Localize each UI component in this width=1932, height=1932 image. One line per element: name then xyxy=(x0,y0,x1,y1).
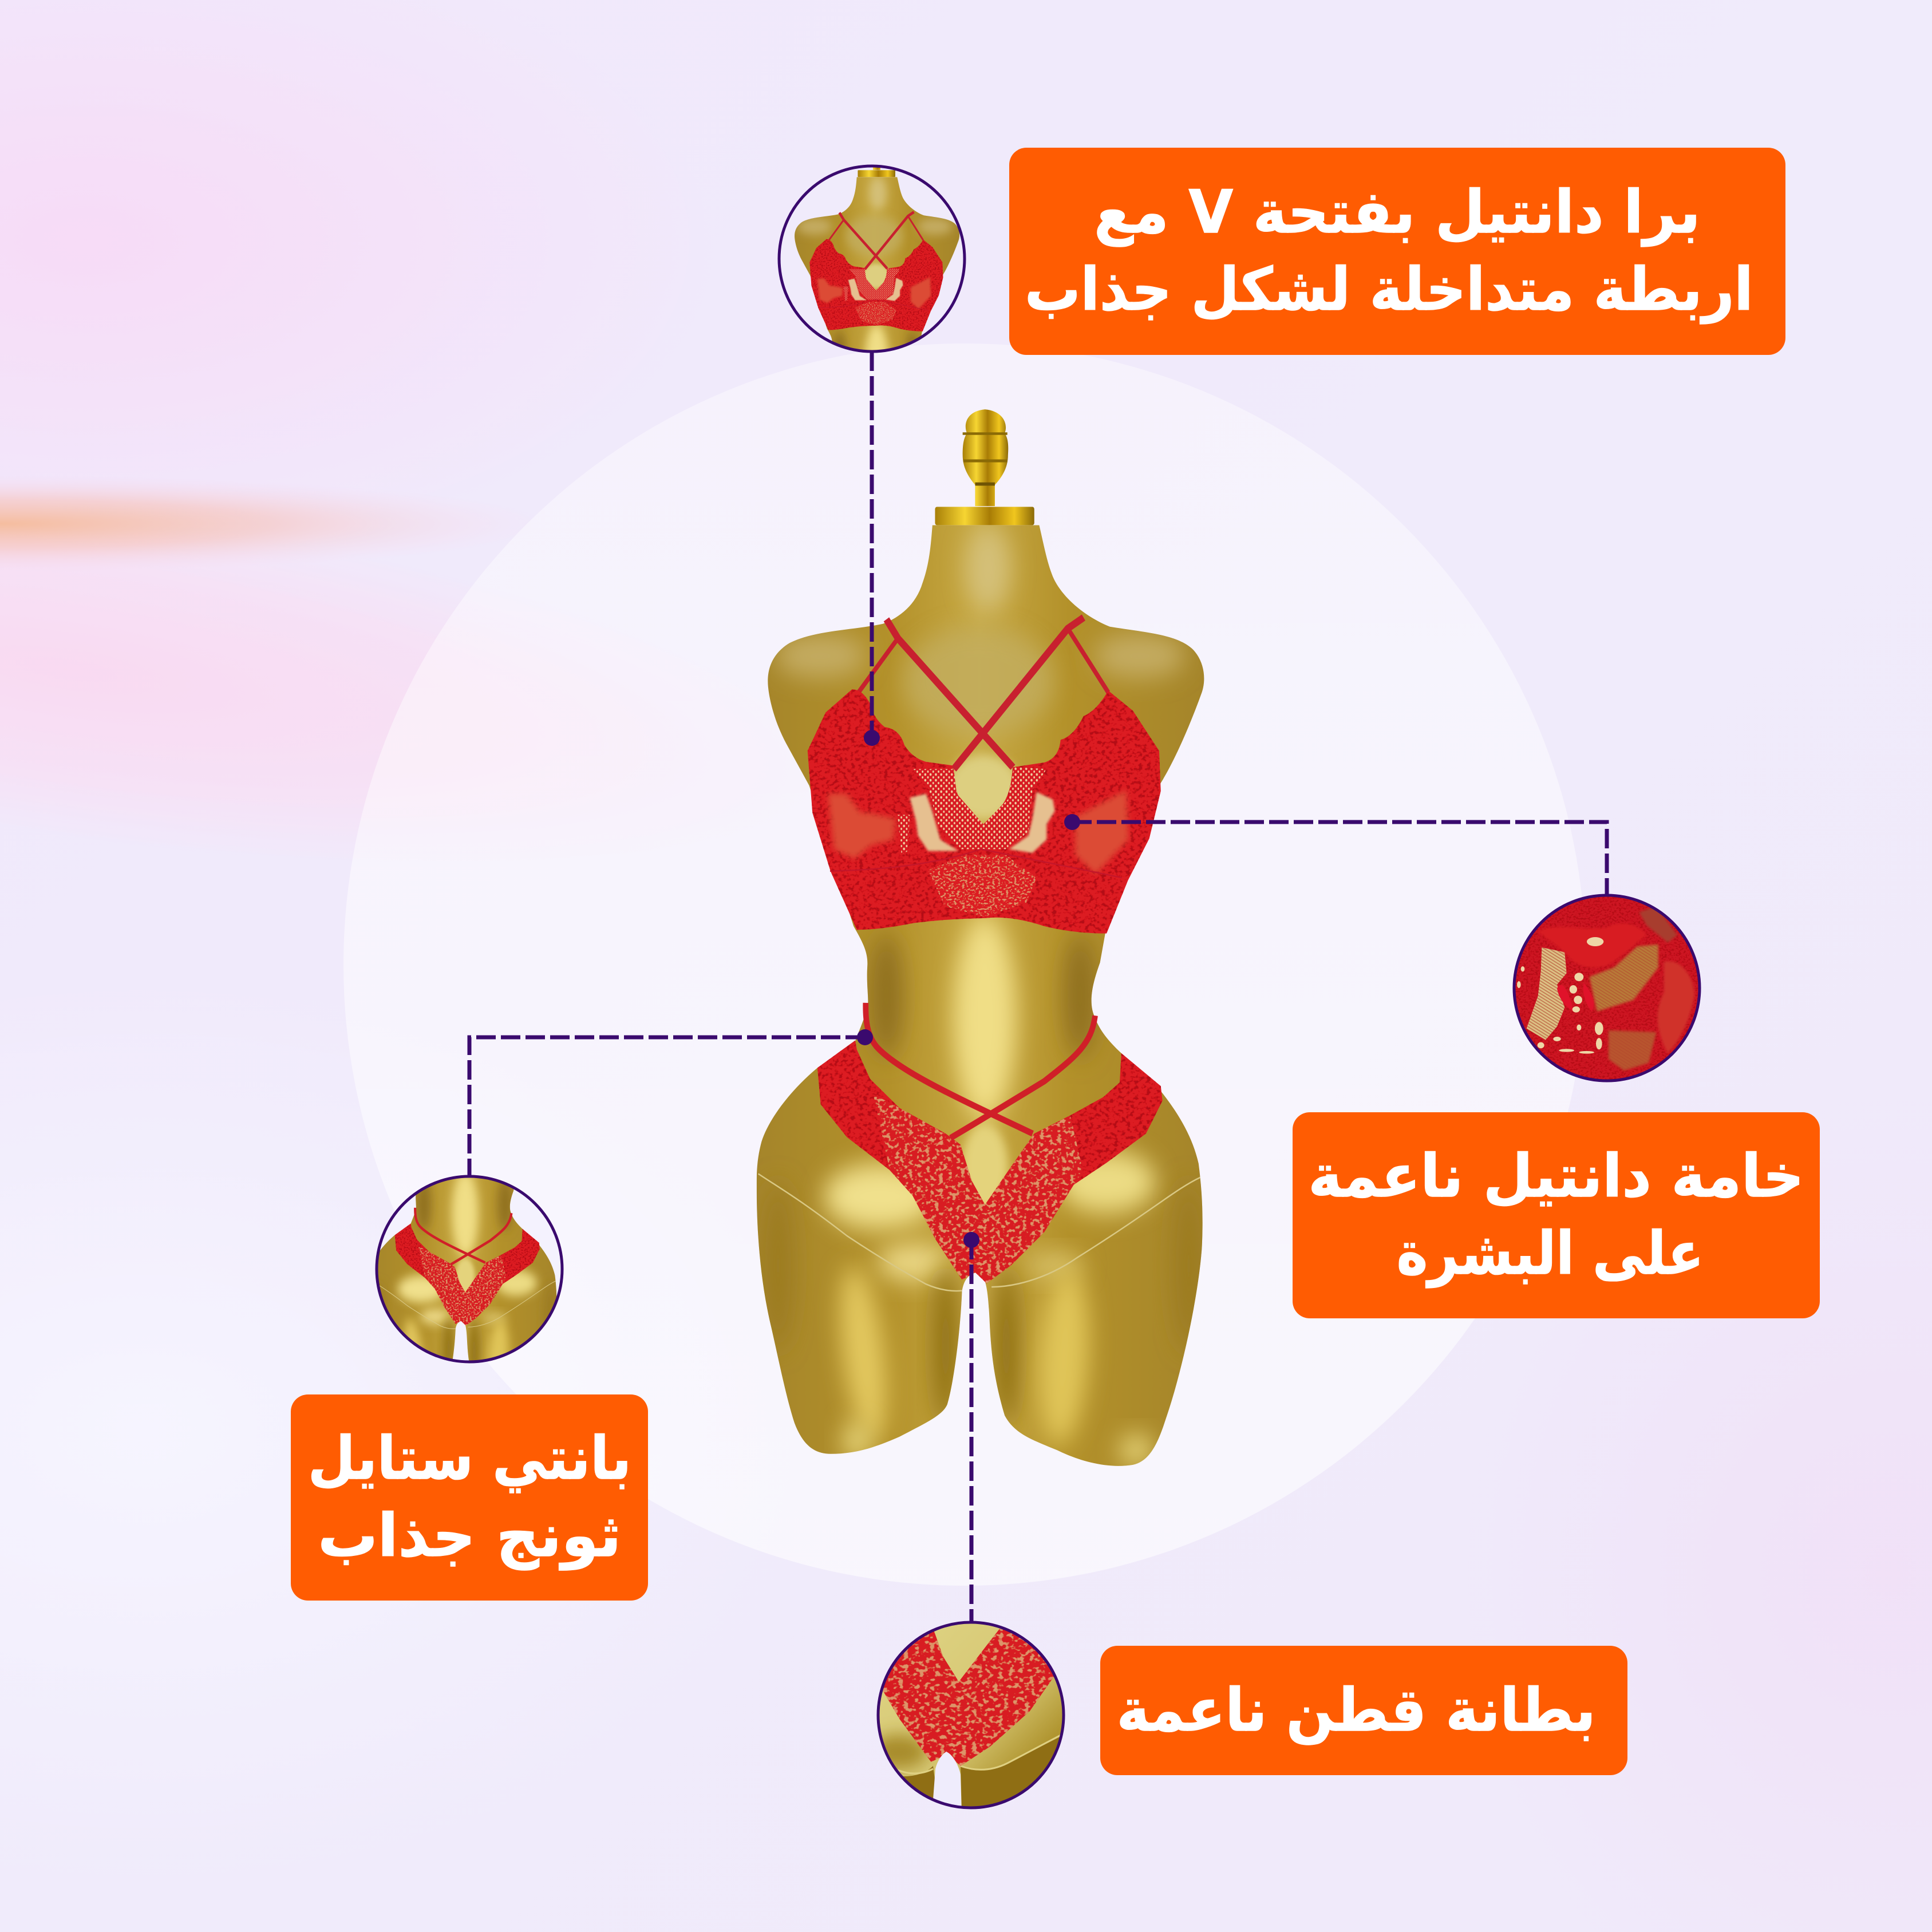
callout line: cotton lining detail xyxy=(963,1232,979,1622)
thong waist straps xyxy=(866,1003,1095,1138)
callout line: thong detail xyxy=(469,1029,873,1176)
label: soft cotton lining xyxy=(1100,1646,1627,1775)
thong lace panels xyxy=(817,1041,1163,1283)
bra straps xyxy=(859,618,1108,769)
callout line: bra detail xyxy=(864,351,880,746)
large pale circle behind mannequin xyxy=(343,343,1586,1586)
label: soft cotton lining: بطانة قطن ناعمة xyxy=(1117,1676,1596,1745)
label: thong style panty: بانتي ستايل xyxy=(308,1424,631,1493)
mannequin finial and collar xyxy=(935,409,1034,525)
label: soft lace fabric: على البشرة xyxy=(1397,1219,1704,1288)
detail circle: lace fabric xyxy=(1514,895,1700,1082)
label: soft lace fabric xyxy=(1293,1112,1820,1318)
detail circle: bra xyxy=(777,165,966,353)
callout line: lace fabric detail xyxy=(1064,814,1607,895)
label: thong style panty xyxy=(291,1394,648,1601)
label: V-neck lace bra: اربطة متداخلة لشكل جذاب xyxy=(1025,255,1753,324)
detail circle: cotton lining xyxy=(877,1621,1065,1809)
mannequin gold body xyxy=(735,513,1228,1481)
label: V-neck lace bra xyxy=(1009,148,1785,355)
detail circle: thong xyxy=(376,1175,563,1364)
label: soft lace fabric: خامة دانتيل ناعمة xyxy=(1308,1142,1804,1211)
bra lace cups and band xyxy=(808,689,1161,934)
label: thong style panty: ثونج جذاب xyxy=(318,1502,621,1570)
mannequin wearing red lace set xyxy=(735,409,1228,1481)
label: V-neck lace bra: برا دانتيل بفتحة V مع xyxy=(1094,178,1701,247)
bra sheer panels and open-work xyxy=(828,767,1128,917)
